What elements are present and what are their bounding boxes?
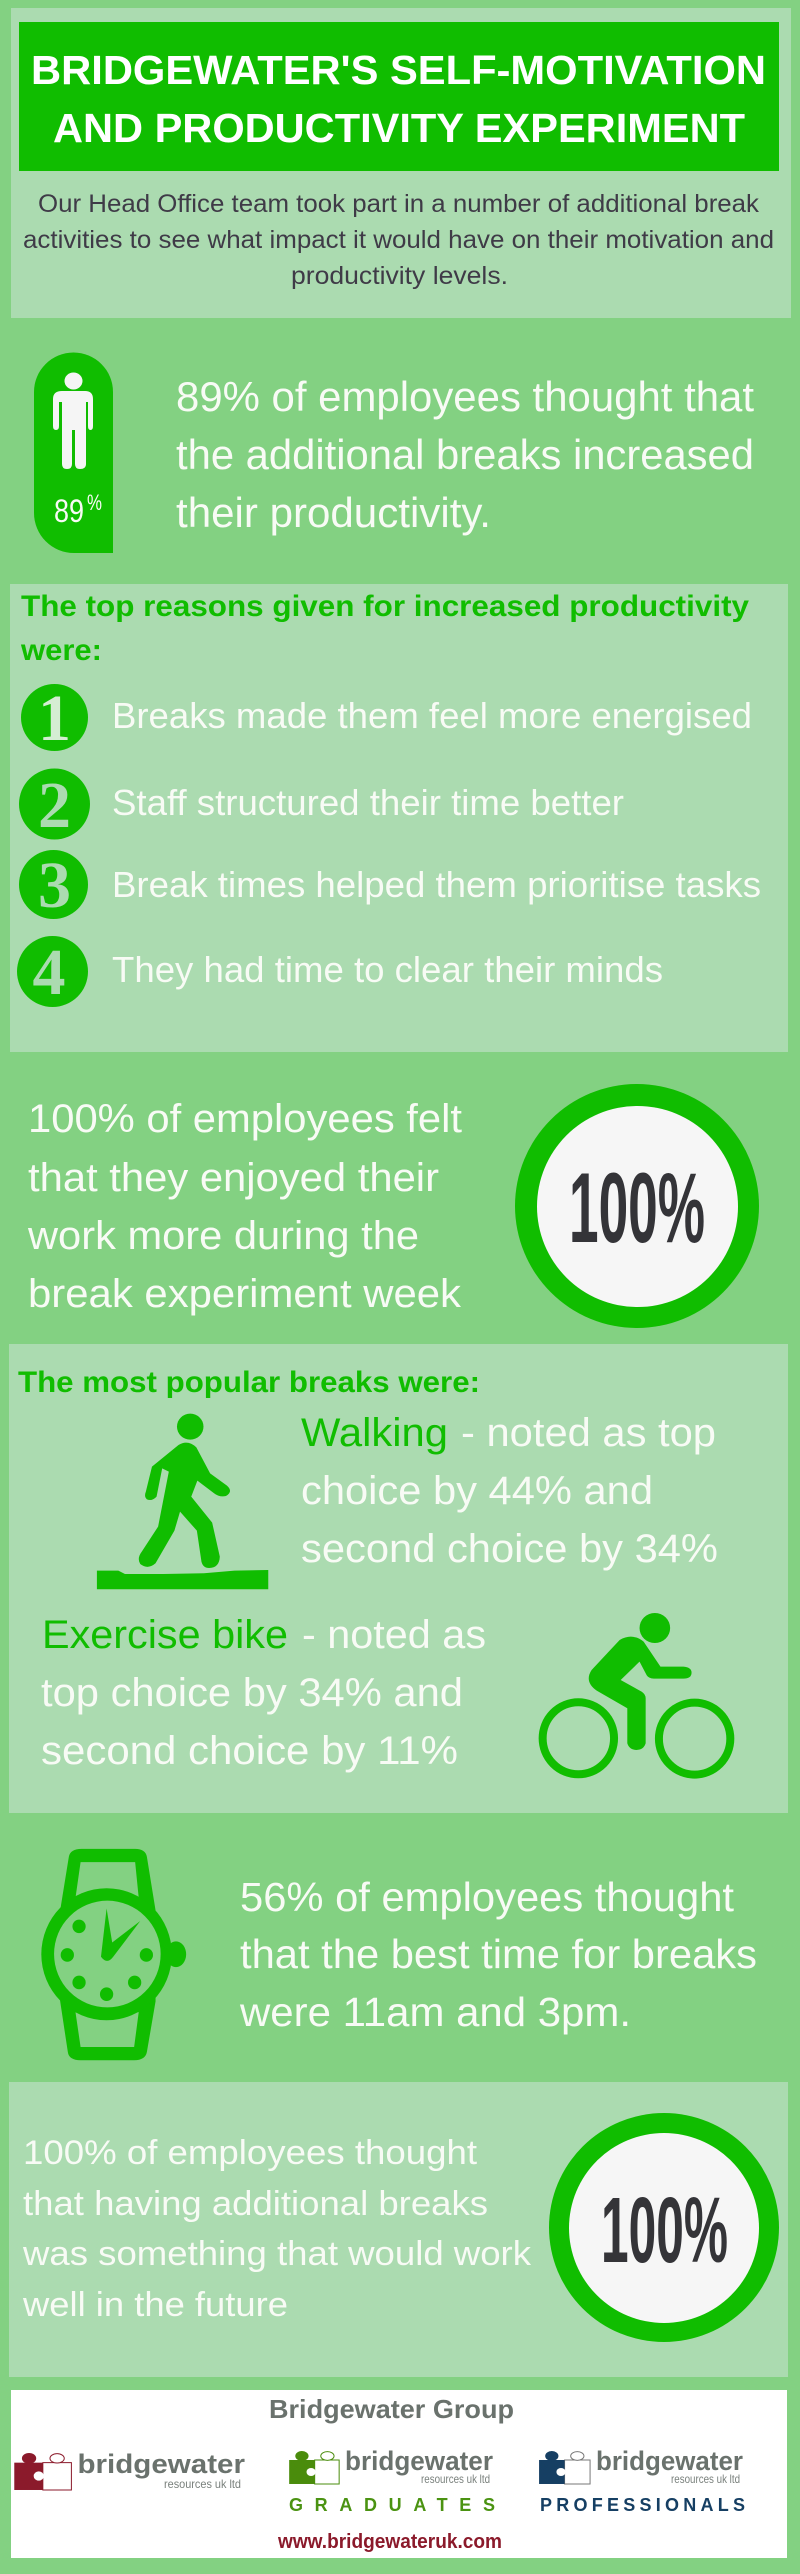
stat text: 89 percent: 89% of employees thought that xyxy=(176,373,754,420)
stat text: enjoyed work: break experiment week xyxy=(28,1272,462,1316)
intro text: activities to see what impact it would have on their motivation and xyxy=(23,226,774,254)
text: future breaks: was something that would work xyxy=(22,2235,532,2273)
panel: popular breaks xyxy=(9,1344,788,1813)
panel: introduction xyxy=(11,8,791,318)
logo: bridgewater resources: bridgewater xyxy=(78,2449,246,2479)
stat text: 89 percent xyxy=(176,373,754,536)
ring: 100 percent enjoyed xyxy=(515,1084,759,1328)
stat text: best time for breaks: that the best time for breaks xyxy=(240,1931,757,1977)
heading: top reasons: were: xyxy=(20,634,102,667)
reason 4: They had time to clear their minds xyxy=(112,949,663,990)
reason 4: 4 xyxy=(32,936,66,1009)
icon: cyclist xyxy=(543,1613,730,1775)
icon: person 89 percent pill: 89 xyxy=(54,493,84,529)
intro text: Our Head Office team took part in a number of additional break xyxy=(38,190,760,218)
stat text: 89 percent: their productivity. xyxy=(176,489,491,536)
website url: www.bridgewateruk.com xyxy=(277,2531,502,2553)
logo: bridgewater graduates: resources uk ltd xyxy=(421,2472,490,2486)
reason 1: 1 xyxy=(38,682,71,755)
reason 3: Break times helped them prioritise tasks xyxy=(112,864,761,905)
reason 2: Staff structured their time better xyxy=(112,782,624,823)
panel: top reasons xyxy=(10,584,788,1052)
reason 4 xyxy=(17,936,663,1009)
logo: bridgewater professionals: resources uk ltd xyxy=(671,2472,740,2486)
stat text: best time for breaks: were 11am and 3pm. xyxy=(239,1989,631,2035)
stat text: 89 percent: the additional breaks increased xyxy=(176,431,754,478)
logo: bridgewater professionals: PROFESSIONALS xyxy=(540,2495,745,2515)
intro text: productivity levels. xyxy=(291,262,508,290)
heading: top reasons: The top reasons given for increased productivity xyxy=(21,590,749,623)
stat text: enjoyed work: that they enjoyed their xyxy=(28,1156,439,1200)
text: future breaks xyxy=(22,2134,532,2324)
intro text xyxy=(23,190,774,290)
stat text: enjoyed work: 100% of employees felt xyxy=(28,1097,462,1141)
text: future breaks: well in the future xyxy=(22,2286,288,2324)
text: walking: - noted as top xyxy=(461,1411,716,1455)
reason 2: 2 xyxy=(38,769,71,842)
text: future breaks: that having additional breaks xyxy=(23,2185,488,2223)
reason 3 xyxy=(19,849,761,922)
text: exercise bike: Exercise bike xyxy=(42,1613,288,1657)
title banner: BRIDGEWATER'S SELF-MOTIVATION xyxy=(31,47,766,93)
stat text: best time for breaks xyxy=(239,1874,757,2035)
reason 2 xyxy=(19,768,624,842)
text: exercise bike: - noted as xyxy=(302,1613,486,1657)
reason 1 xyxy=(21,682,752,755)
title banner xyxy=(19,22,779,171)
text: exercise bike: top choice by 34% and xyxy=(41,1671,463,1715)
icon: walking person xyxy=(97,1414,268,1589)
ring: 100 percent future xyxy=(549,2113,779,2342)
logo: bridgewater graduates: bridgewater xyxy=(345,2446,493,2476)
footer heading: Bridgewater Group xyxy=(269,2394,514,2424)
logo: bridgewater professionals xyxy=(539,2446,745,2515)
text: walking: Walking xyxy=(301,1411,448,1455)
stat text: enjoyed work xyxy=(27,1097,462,1316)
text: walking xyxy=(301,1411,718,1571)
panel: future breaks xyxy=(9,2082,788,2377)
logo: bridgewater resources: resources uk ltd xyxy=(164,2477,241,2491)
icon: person 89 percent pill: % xyxy=(87,490,102,515)
text: walking: choice by 44% and xyxy=(301,1469,653,1513)
heading: popular breaks: The most popular breaks were: xyxy=(18,1366,480,1399)
text: future breaks: 100% of employees thought xyxy=(23,2134,478,2172)
panel: footer logos xyxy=(11,2390,787,2558)
text: exercise bike: second choice by 11% xyxy=(41,1729,458,1773)
stat text: enjoyed work: work more during the xyxy=(27,1214,419,1258)
logo: bridgewater graduates xyxy=(289,2446,495,2515)
icon: person 89 percent pill xyxy=(34,353,113,553)
stat text: best time for breaks: 56% of employees thought xyxy=(240,1874,735,1920)
reason 3: 3 xyxy=(38,849,71,922)
heading: top reasons xyxy=(20,590,749,667)
icon: wristwatch xyxy=(41,1849,186,2060)
text: walking: second choice by 34% xyxy=(301,1527,718,1571)
logo: bridgewater professionals: bridgewater xyxy=(596,2446,743,2476)
text: exercise bike xyxy=(41,1613,486,1773)
logo: bridgewater graduates: GRADUATES xyxy=(289,2495,495,2515)
reason 1: Breaks made them feel more energised xyxy=(112,695,752,736)
logo: bridgewater resources xyxy=(14,2449,246,2491)
title banner: AND PRODUCTIVITY EXPERIMENT xyxy=(53,105,745,151)
